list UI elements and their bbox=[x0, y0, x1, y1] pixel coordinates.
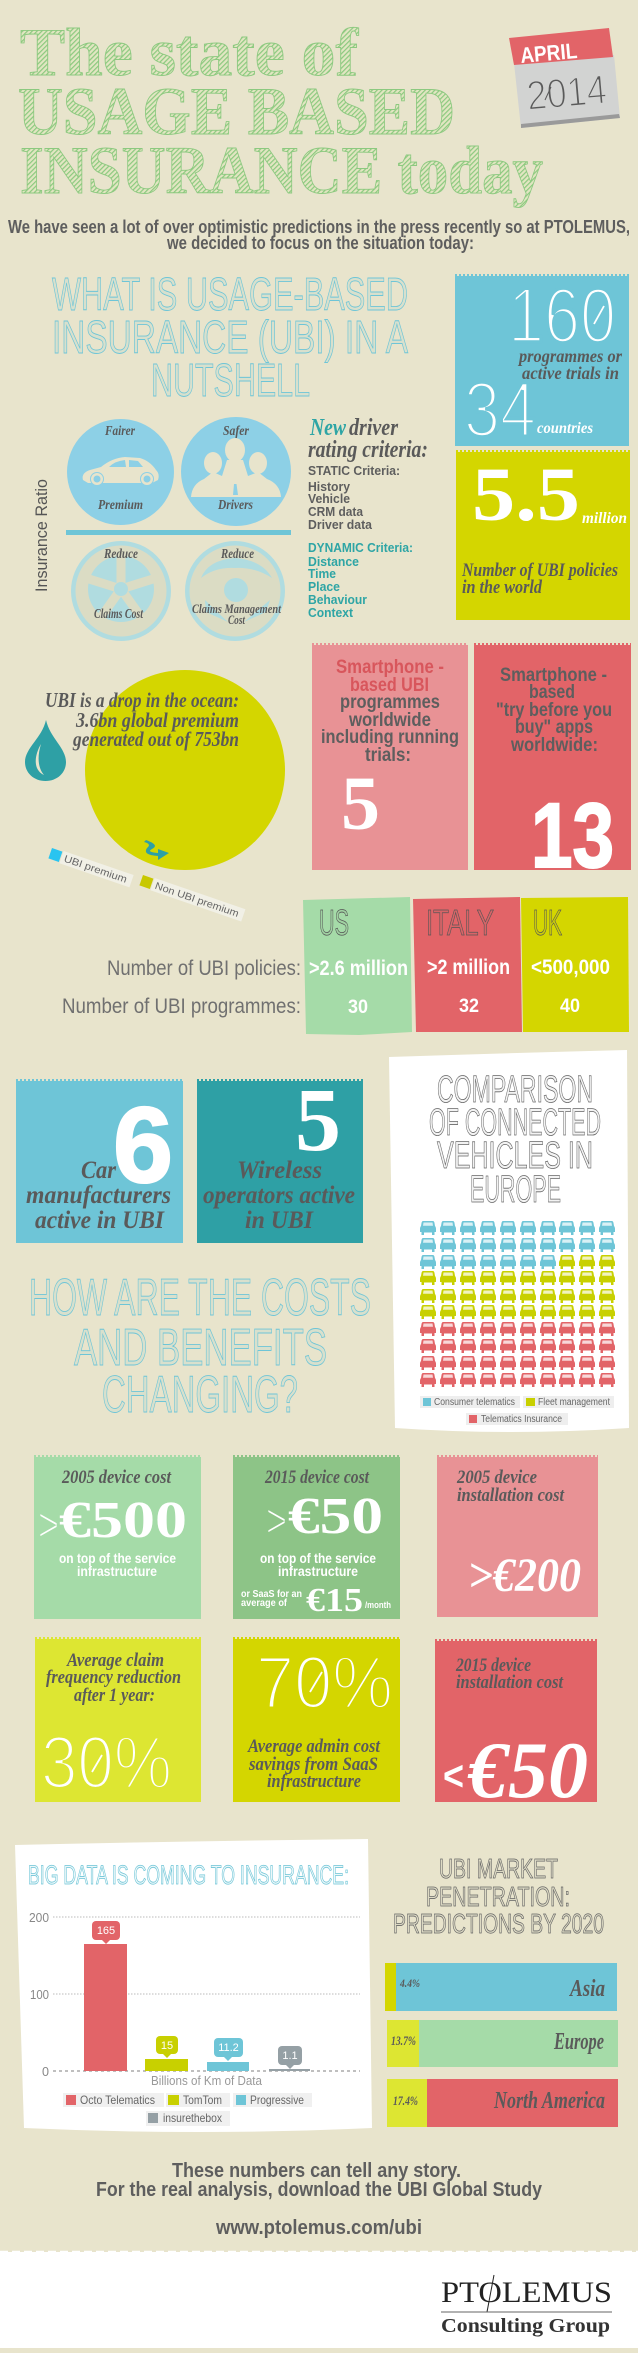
circle: reduce claims management cost: Cost bbox=[228, 612, 245, 627]
panel: 160 programmes in 34 countries: countries bbox=[537, 420, 593, 437]
row labels: policies and programmes: Number of UBI policies: bbox=[107, 957, 301, 980]
bar: Asia: Asia bbox=[568, 1976, 605, 2002]
panel: try before you buy apps: Smartphone - bbox=[500, 665, 607, 686]
panel: UK: 40 bbox=[560, 996, 580, 1017]
panel: 5 wireless operators: operators active bbox=[203, 1182, 355, 1209]
bar chart: billions of km of data bbox=[29, 1910, 360, 2088]
bar: North America bbox=[387, 2079, 618, 2127]
circle: reduce claims management cost: Reduce bbox=[220, 547, 254, 562]
panel: 2005 device cost: infrastructure bbox=[77, 1563, 157, 1579]
divider bar bbox=[66, 530, 291, 535]
circle: reduce claims cost: Reduce bbox=[103, 547, 138, 562]
text: drop in the ocean: UBI is a drop in the ocean: bbox=[45, 688, 239, 712]
logo: Ptolemus Consulting Group: PTOLEMUS bbox=[441, 2276, 612, 2309]
circle: reduce claims management cost bbox=[185, 541, 285, 641]
bar chart: billions of km of data: 200 bbox=[29, 1910, 49, 1925]
panel: average claim frequency reduction: frequency reduction bbox=[46, 1667, 181, 1688]
legend: UBI premium: UBI premium bbox=[62, 854, 128, 886]
panel: 6 car manufacturers: manufacturers bbox=[26, 1182, 171, 1209]
panel: 2015 installation cost bbox=[435, 1640, 597, 1815]
bar chart: billions of km of data: 15 bbox=[161, 2040, 173, 2052]
panel: smartphone UBI programmes: based UBI bbox=[350, 675, 429, 696]
text: drop in the ocean: 3.6bn global premium bbox=[75, 708, 239, 732]
panel: UK bbox=[521, 897, 629, 1032]
panel: admin cost savings: 70% bbox=[256, 1641, 393, 1724]
text: drop in the ocean: generated out of 753bn bbox=[72, 727, 239, 751]
panel: 5 wireless operators: in UBI bbox=[245, 1207, 314, 1234]
panel: smartphone UBI programmes bbox=[312, 644, 468, 870]
text block: driver rating criteria: History bbox=[308, 479, 351, 494]
panel: smartphone UBI programmes: including running bbox=[321, 727, 459, 748]
heading: how are the costs changing bbox=[29, 1269, 371, 1424]
text block: driver rating criteria: Context bbox=[308, 605, 354, 620]
panel: 2005 device cost: on top of the service bbox=[59, 1550, 176, 1566]
bar chart: billions of km of data: 100 bbox=[30, 1987, 49, 2002]
panel: 2015 device cost: €15 bbox=[306, 1582, 363, 1619]
panel: US bbox=[303, 897, 412, 1035]
panel: 5.5 million policies: million bbox=[582, 510, 627, 527]
circle: reduce claims management cost: Claims Management bbox=[192, 601, 281, 616]
heading: UBI market penetration: PENETRATION: bbox=[426, 1881, 570, 1912]
logo: Ptolemus Consulting Group: Consulting Group bbox=[441, 2315, 610, 2337]
panel: 160 programmes in 34 countries: 160 bbox=[508, 271, 616, 359]
text block: driver rating criteria: Distance bbox=[308, 554, 359, 569]
bar: North America: North America bbox=[493, 2088, 605, 2114]
intro text bbox=[8, 217, 630, 253]
panel: smartphone UBI programmes: 5 bbox=[341, 762, 380, 846]
legend: vehicle types: Telematics Insurance bbox=[481, 1414, 562, 1425]
panel: average claim frequency reduction: Average claim bbox=[66, 1650, 164, 1671]
panel: 2015 device cost: or SaaS for an bbox=[241, 1589, 302, 1600]
heading: how are the costs changing: CHANGING? bbox=[102, 1366, 298, 1424]
panel: 2015 installation cost: 2015 device bbox=[455, 1655, 531, 1676]
panel: 2005 device cost: €500 bbox=[59, 1492, 187, 1549]
bar chart: billions of km of data: 1.1 bbox=[282, 2050, 298, 2062]
panel: 5 wireless operators bbox=[197, 1071, 363, 1243]
panel: 6 car manufacturers bbox=[16, 1080, 183, 1243]
circle: safer drivers: Safer bbox=[223, 424, 249, 439]
legend: telematics companies: Progressive bbox=[250, 2093, 304, 2107]
circle: safer drivers bbox=[181, 417, 291, 526]
panel: 160 programmes in 34 countries: programmes or bbox=[517, 346, 623, 366]
panel: 2015 device cost: infrastructure bbox=[278, 1563, 358, 1579]
text block: driver rating criteria: rating criteria: bbox=[308, 437, 428, 463]
panel: Italy: >2 million bbox=[427, 956, 510, 979]
panel: 5.5 million policies: 5.5 bbox=[472, 453, 580, 537]
title: INSURANCE today bbox=[20, 132, 543, 208]
icon: small arrow bbox=[144, 840, 169, 860]
heading: what is UBI: NUTSHELL bbox=[151, 354, 310, 406]
icon: calendar April 2014: 2014 bbox=[525, 66, 608, 119]
panel: try before you buy apps: worldwide: bbox=[510, 735, 598, 756]
panel: 5 wireless operators: 5 bbox=[295, 1071, 341, 1170]
heading: UBI market penetration bbox=[393, 1853, 604, 1939]
panel: 2015 installation cost: installation cost bbox=[456, 1672, 564, 1693]
panel: 6 car manufacturers: Car bbox=[81, 1157, 116, 1184]
text block: driver rating criteria: driver bbox=[349, 415, 399, 441]
panel: 2015 device cost: €50 bbox=[288, 1488, 383, 1545]
panel: 5.5 million policies bbox=[456, 451, 630, 620]
panel: UK: <500,000 bbox=[531, 956, 610, 979]
bar: Europe: Europe bbox=[553, 2029, 604, 2055]
logo: Ptolemus Consulting Group bbox=[441, 2275, 612, 2337]
label: insurance ratio: Insurance Ratio bbox=[32, 479, 51, 592]
text block: driver rating criteria: CRM data bbox=[308, 504, 364, 519]
panel: average claim frequency reduction: 30% bbox=[41, 1721, 172, 1804]
panel: smartphone UBI programmes: Smartphone - bbox=[336, 657, 444, 678]
panel: try before you buy apps bbox=[474, 644, 631, 887]
title: The state of bbox=[20, 14, 359, 90]
bar chart: billions of km of data: 11.2 bbox=[218, 2042, 239, 2054]
text: drop in the ocean bbox=[45, 688, 239, 751]
panel: 2015 device cost: average of bbox=[241, 1598, 288, 1609]
panel: 2005 device cost bbox=[34, 1456, 201, 1619]
panel: average claim frequency reduction bbox=[35, 1638, 201, 1804]
panel: 2015 device cost bbox=[233, 1456, 400, 1619]
panel: 2005 installation cost: 2005 device bbox=[456, 1467, 537, 1488]
circle: fairer premium: Fairer bbox=[104, 424, 135, 439]
panel: 160 programmes in 34 countries bbox=[455, 271, 629, 453]
legend: non UBI premium bbox=[139, 874, 245, 922]
row labels: policies and programmes: Number of UBI programmes: bbox=[62, 995, 301, 1018]
panel: Italy: 32 bbox=[459, 996, 479, 1017]
panel: 2015 device cost: 2015 device cost bbox=[264, 1467, 370, 1488]
text block: driver rating criteria: Place bbox=[308, 579, 340, 594]
text block: driver rating criteria: Behaviour bbox=[308, 592, 367, 607]
legend: telematics companies: TomTom bbox=[183, 2093, 222, 2107]
legend: vehicle types: Fleet management bbox=[538, 1397, 610, 1408]
circle: fairer premium: Premium bbox=[98, 498, 143, 513]
chart: car pictogram grid bbox=[420, 1221, 615, 1387]
footer band with logo bbox=[0, 2252, 638, 2348]
heading: UBI market penetration: UBI MARKET bbox=[439, 1853, 558, 1884]
text block: driver rating criteria: New bbox=[309, 415, 347, 441]
circle: safer drivers: Drivers bbox=[217, 498, 253, 513]
heading: what is UBI: WHAT IS USAGE-BASED bbox=[52, 268, 408, 320]
bar: Europe: 13.7% bbox=[391, 2033, 416, 2048]
panel: 2015 installation cost: < bbox=[443, 1752, 464, 1799]
bar: Europe bbox=[387, 2020, 618, 2067]
circle: reduce claims cost bbox=[71, 541, 171, 641]
panel: 160 programmes in 34 countries: active trials in bbox=[522, 363, 619, 383]
bar: Asia: 4.4% bbox=[399, 1976, 420, 1990]
text block: driver rating criteria: Vehicle bbox=[308, 491, 350, 506]
panel: 5.5 million policies: in the world bbox=[462, 577, 542, 598]
panel: UK: UK bbox=[533, 902, 562, 943]
panel: US: >2.6 million bbox=[309, 957, 408, 980]
legend: UBI premium bbox=[48, 847, 134, 887]
panel: smartphone UBI programmes: programmes bbox=[340, 692, 440, 713]
icon: calendar April 2014 bbox=[509, 28, 620, 128]
heading: comparison bbox=[429, 1069, 601, 1211]
panel: US: 30 bbox=[348, 997, 368, 1018]
panel: US: US bbox=[319, 902, 349, 943]
icon: water drop bbox=[25, 720, 66, 781]
panel: Italy: ITALY bbox=[426, 902, 494, 943]
panel: 160 programmes in 34 countries: 34 bbox=[464, 365, 536, 453]
footer call to action: These numbers can tell any story. bbox=[172, 2160, 461, 2182]
legend: non UBI premium: Non UBI premium bbox=[153, 881, 240, 920]
panel: 2005 device cost: 2005 device cost bbox=[61, 1467, 172, 1488]
heading: comparison: EUROPE bbox=[470, 1169, 561, 1211]
panel: admin cost savings bbox=[233, 1638, 400, 1802]
legend: telematics companies: insurethebox bbox=[163, 2111, 222, 2125]
bar: Asia bbox=[385, 1963, 617, 2011]
text block: driver rating criteria: DYNAMIC Criteria: bbox=[308, 540, 413, 555]
panel: 6 car manufacturers: 6 bbox=[113, 1084, 173, 1205]
heading: big data: BIG DATA IS COMING TO INSURANCE: bbox=[28, 1860, 349, 1890]
circle: fairer premium bbox=[67, 419, 174, 525]
panel: admin cost savings: infrastructure bbox=[267, 1771, 361, 1792]
panel: admin cost savings: savings from SaaS bbox=[248, 1754, 378, 1775]
heading: what is UBI: INSURANCE (UBI) IN A bbox=[52, 311, 408, 363]
bar chart: billions of km of data: Billions of Km of Data bbox=[151, 2073, 263, 2088]
title bbox=[18, 14, 543, 208]
bar chart: billions of km of data: 0 bbox=[42, 2064, 49, 2079]
panel: average claim frequency reduction: after 1 year: bbox=[74, 1685, 155, 1706]
panel: 2015 device cost: /month bbox=[365, 1600, 391, 1610]
panel: Italy bbox=[413, 897, 522, 1032]
panel: comparison of connected vehicles bbox=[389, 1050, 629, 1432]
heading: how are the costs changing: HOW ARE THE COSTS bbox=[29, 1269, 371, 1327]
panel: 5 wireless operators: Wireless bbox=[237, 1157, 322, 1184]
row labels: policies and programmes bbox=[62, 957, 301, 1018]
panel: try before you buy apps: "try before you bbox=[496, 700, 612, 721]
icon: people bbox=[191, 438, 281, 497]
panel: 2005 installation cost: installation cost bbox=[457, 1485, 565, 1506]
panel: smartphone UBI programmes: worldwide bbox=[348, 710, 431, 731]
chart: UBI premium pie bbox=[85, 670, 285, 870]
legend: vehicle types bbox=[420, 1396, 614, 1425]
icon: wheel bbox=[88, 555, 154, 622]
panel: 2015 installation cost: €50 bbox=[467, 1727, 588, 1815]
footer call to action bbox=[96, 2160, 543, 2239]
circle: reduce claims cost: Claims Cost bbox=[94, 607, 144, 622]
footer call to action: For the real analysis, download the UBI Global Study bbox=[96, 2179, 543, 2201]
panel: try before you buy apps: based bbox=[529, 682, 575, 703]
text block: driver rating criteria: Driver data bbox=[308, 517, 373, 532]
text block: driver rating criteria: Time bbox=[308, 566, 336, 581]
heading: how are the costs changing: AND BENEFITS bbox=[74, 1319, 327, 1377]
intro text: we decided to focus on the situation today: bbox=[166, 233, 474, 253]
panel: 2005 installation cost: >€200 bbox=[468, 1549, 581, 1602]
text block: driver rating criteria: STATIC Criteria: bbox=[308, 463, 400, 478]
legend: vehicle types: Consumer telematics bbox=[434, 1397, 515, 1408]
panel: try before you buy apps: 13 bbox=[531, 785, 614, 887]
panel: smartphone UBI programmes: trials: bbox=[365, 745, 411, 766]
text block: driver rating criteria bbox=[308, 415, 428, 620]
bar: North America: 17.4% bbox=[393, 2093, 418, 2108]
panel: big data chart bbox=[15, 1839, 372, 2132]
bar chart: billions of km of data: 165 bbox=[97, 1925, 115, 1937]
panel: 6 car manufacturers: active in UBI bbox=[35, 1207, 165, 1234]
panel: 2005 installation cost bbox=[437, 1456, 598, 1617]
icon: car bbox=[83, 457, 159, 486]
panel: 2015 device cost: > bbox=[266, 1495, 287, 1548]
footer call to action: www.ptolemus.com/ubi bbox=[215, 2217, 422, 2239]
panel: 2015 device cost: on top of the service bbox=[260, 1550, 376, 1566]
icon: steering wheel bbox=[201, 558, 272, 622]
panel: 2005 device cost: > bbox=[38, 1499, 59, 1552]
title: USAGE BASED bbox=[18, 73, 455, 149]
legend: telematics companies bbox=[63, 2093, 312, 2126]
panel: admin cost savings: Average admin cost bbox=[247, 1736, 381, 1757]
icon: calendar April 2014: APRIL bbox=[519, 38, 578, 68]
heading: what is UBI bbox=[52, 268, 408, 406]
legend: telematics companies: Octo Telematics bbox=[80, 2093, 155, 2107]
panel: try before you buy apps: buy" apps bbox=[515, 717, 593, 738]
